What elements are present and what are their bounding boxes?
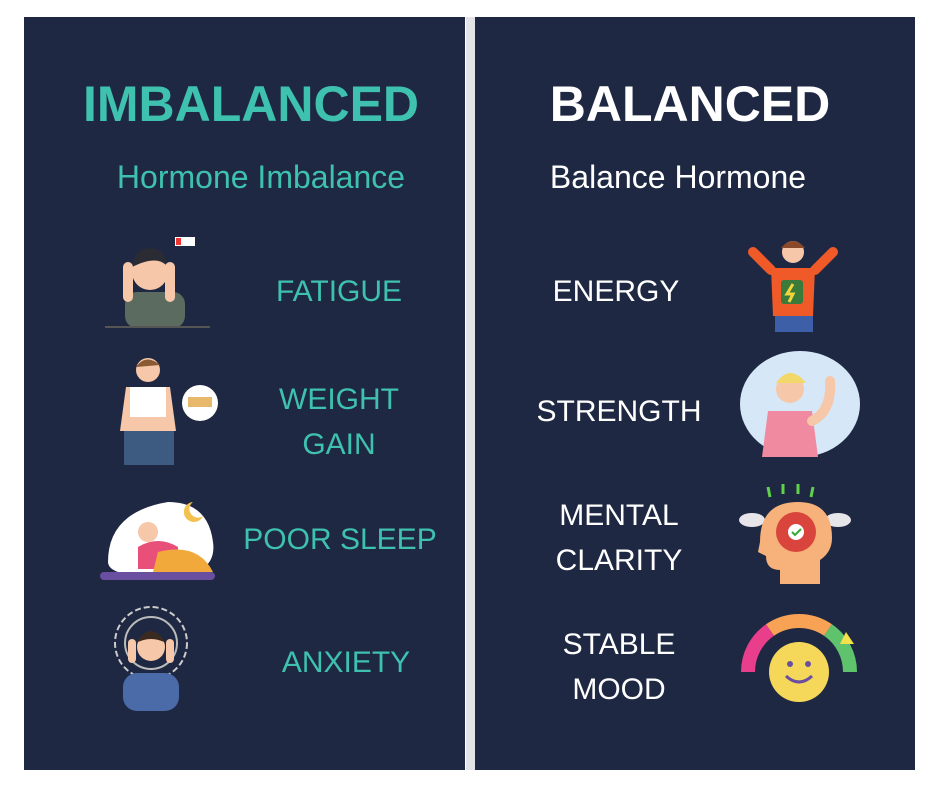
label: mental clarity: CLARITY bbox=[556, 544, 682, 577]
panel: imbalanced bbox=[24, 17, 465, 770]
label: weight gain: GAIN bbox=[302, 428, 376, 461]
icon: stable mood gauge bbox=[741, 614, 857, 702]
label: mental clarity bbox=[556, 499, 682, 577]
icon: strength bbox=[740, 351, 860, 457]
icon: mental clarity bbox=[739, 484, 851, 584]
label: energy: ENERGY bbox=[553, 275, 679, 308]
subtitle: balance hormone: Balance Hormone bbox=[550, 159, 806, 195]
icon: poor sleep bbox=[100, 502, 215, 580]
label: stable mood: STABLE bbox=[563, 628, 675, 661]
label: anxiety: ANXIETY bbox=[282, 646, 410, 679]
label: poor sleep: POOR SLEEP bbox=[243, 523, 437, 556]
label: strength: STRENGTH bbox=[536, 395, 702, 428]
label: mental clarity: MENTAL bbox=[559, 499, 679, 532]
icon: energy person bbox=[748, 241, 838, 332]
divider bbox=[466, 17, 475, 770]
label: stable mood: MOOD bbox=[572, 673, 666, 706]
label: fatigue: FATIGUE bbox=[276, 275, 402, 308]
heading: balanced: BALANCED bbox=[550, 76, 830, 132]
subtitle: hormone imbalance: Hormone Imbalance bbox=[117, 159, 405, 195]
label: weight gain: WEIGHT bbox=[279, 383, 399, 416]
panel: balanced bbox=[475, 17, 915, 770]
label: weight gain bbox=[279, 383, 399, 461]
icon: weight gain person bbox=[120, 358, 218, 465]
icon: fatigue person bbox=[105, 237, 210, 328]
heading: imbalanced: IMBALANCED bbox=[83, 76, 419, 132]
icon: anxiety bbox=[114, 606, 188, 711]
label: stable mood bbox=[563, 628, 675, 706]
